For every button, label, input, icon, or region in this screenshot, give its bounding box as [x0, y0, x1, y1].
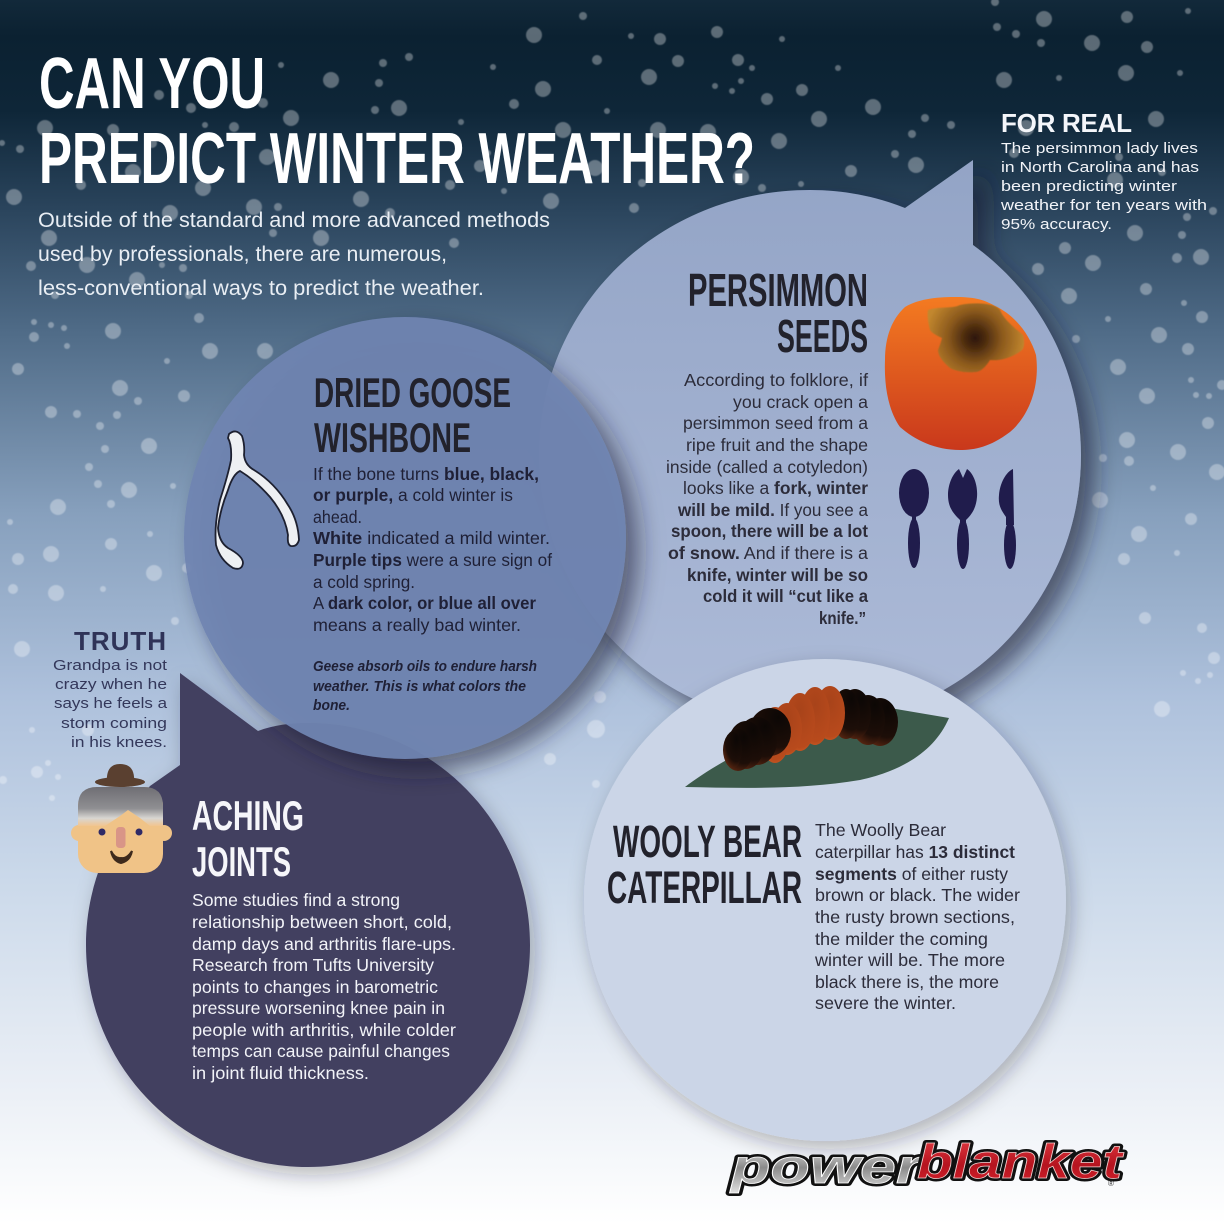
- callout: for real: FOR REAL: [1001, 108, 1132, 138]
- heading: persimmon seeds: [688, 264, 868, 362]
- text: wooly bear body: [814, 820, 1020, 1013]
- text: wishbone body: A dark color, or blue all over: [313, 593, 536, 613]
- logo: powerblanket: power: [728, 1141, 924, 1194]
- heading: aching joints: ACHING: [192, 792, 304, 839]
- text: aching joints body: pressure worsening knee pain in: [192, 998, 445, 1018]
- text: persimmon seeds body: knife, winter will be so: [687, 565, 868, 585]
- text: wishbone body: or purple, a cold winter is: [313, 485, 513, 505]
- callout: for real: [1000, 108, 1207, 233]
- title: CAN YOU: [39, 44, 265, 124]
- text: wishbone note: [313, 658, 537, 714]
- panel: dried goose wishbone circle: [184, 317, 626, 759]
- heading: persimmon seeds: SEEDS: [777, 310, 868, 362]
- heading: aching joints: JOINTS: [192, 838, 291, 885]
- intro text: less-conventional ways to predict the weather.: [38, 277, 484, 300]
- heading: wooly bear caterpillar: [607, 816, 802, 913]
- text: wishbone note: bone.: [313, 697, 350, 714]
- text: wishbone body: White indicated a mild winter.: [313, 528, 550, 548]
- icon: persimmon fruit: [885, 297, 1037, 450]
- intro text: used by professionals, there are numerous,: [38, 243, 447, 266]
- icon: wishbone: [216, 431, 299, 569]
- text: wishbone body: If the bone turns blue, black,: [313, 464, 539, 484]
- text: wishbone body: Purple tips were a sure sign of: [313, 550, 552, 570]
- logo: powerblanket: ®: [1108, 1179, 1114, 1188]
- text: persimmon seeds body: looks like a fork, winter: [683, 478, 868, 498]
- text: wishbone body: a cold spring.: [313, 572, 415, 592]
- text: wishbone body: means a really bad winter.: [313, 615, 521, 635]
- title: PREDICT WINTER WEATHER?: [39, 119, 755, 199]
- callout: for real: 95% accuracy.: [1001, 216, 1112, 233]
- callout: truth: TRUTH: [74, 626, 166, 656]
- snow dots background: [0, 0, 1224, 825]
- text: wooly bear body: brown or black. The wider: [815, 885, 1020, 905]
- text: persimmon seeds body: persimmon seed from a: [683, 413, 868, 433]
- title: [39, 44, 755, 199]
- heading: wooly bear caterpillar: WOOLY BEAR: [613, 816, 802, 867]
- heading: aching joints: [192, 792, 304, 885]
- text: wishbone note: weather. This is what colors the: [313, 678, 526, 695]
- text: persimmon seeds body: of snow. And if there is a: [668, 543, 868, 563]
- logo: powerblanket: [728, 1136, 1124, 1194]
- text: aching joints body: damp days and arthritis flare-ups.: [192, 934, 456, 954]
- text: wishbone note: Geese absorb oils to endure harsh: [313, 658, 537, 675]
- panel: aching joints circle with speech tail: [86, 673, 530, 1167]
- heading: persimmon seeds: PERSIMMON: [688, 264, 868, 316]
- callout: truth: says he feels a: [54, 695, 168, 712]
- text: wooly bear body: severe the winter.: [815, 993, 956, 1013]
- text: aching joints body: people with arthritis, while colder: [192, 1020, 456, 1040]
- text: wooly bear body: winter will be. The more: [814, 950, 1005, 970]
- callout: for real: been predicting winter: [1001, 178, 1177, 195]
- text: persimmon seeds body: knife.”: [819, 608, 866, 628]
- icon: seed knife: [999, 469, 1016, 569]
- icon: seed fork: [948, 469, 977, 569]
- logo: powerblanket: power: [728, 1141, 924, 1194]
- text: persimmon seeds body: ripe fruit and the shape: [686, 435, 868, 455]
- text: persimmon seeds body: inside (called a cotyledon): [666, 457, 868, 477]
- callout: truth: in his knees.: [71, 734, 167, 751]
- text: persimmon seeds body: spoon, there will be a lot: [671, 521, 868, 541]
- text: wooly bear body: the milder the coming: [815, 929, 988, 949]
- text: aching joints body: in joint fluid thickness.: [192, 1063, 369, 1083]
- icon: wooly bear caterpillar on leaf: [685, 686, 949, 788]
- text: wooly bear body: The Woolly Bear: [815, 820, 946, 840]
- panel: persimmon seeds circle with speech tail: [539, 160, 1081, 725]
- callout: for real: weather for ten years with: [1000, 197, 1207, 214]
- text: aching joints body: temps can cause painful changes: [192, 1041, 450, 1061]
- text: aching joints body: [192, 890, 456, 1083]
- text: persimmon seeds body: [666, 370, 868, 628]
- heading: dried goose wishbone: WISHBONE: [314, 414, 471, 461]
- text: wooly bear body: the rusty brown sections,: [815, 907, 1015, 927]
- icon: seed spoon: [899, 469, 929, 568]
- panel: wooly bear circle: [584, 659, 1066, 1141]
- logo: powerblanket: blanket: [917, 1136, 1124, 1189]
- icon: grandpa face: [71, 764, 172, 873]
- text: wooly bear body: segments of either rusty: [815, 864, 1008, 884]
- intro text: Outside of the standard and more advanced methods: [38, 209, 550, 232]
- text: persimmon seeds body: According to folklore, if: [684, 370, 868, 390]
- callout: truth: storm coming: [61, 715, 167, 732]
- callout: truth: [53, 626, 168, 751]
- text: wishbone body: [313, 464, 552, 635]
- logo: powerblanket: blanket: [917, 1136, 1124, 1189]
- callout: for real: in North Carolina and has: [1001, 159, 1199, 176]
- text: wooly bear body: black there is, the more: [815, 972, 999, 992]
- heading: wooly bear caterpillar: CATERPILLAR: [607, 862, 802, 913]
- callout: truth: Grandpa is not: [53, 657, 168, 674]
- text: wooly bear body: caterpillar has 13 distinct: [815, 842, 1015, 862]
- text: persimmon seeds body: will be mild. If you see a: [677, 500, 868, 520]
- text: aching joints body: points to changes in barometric: [192, 977, 438, 997]
- text: persimmon seeds body: you crack open a: [733, 392, 868, 412]
- text: persimmon seeds body: cold it will “cut like a: [703, 586, 868, 606]
- intro text: [38, 209, 550, 300]
- text: aching joints body: relationship between short, cold,: [192, 912, 452, 932]
- text: aching joints body: Research from Tufts University: [192, 955, 434, 975]
- heading: dried goose wishbone: DRIED GOOSE: [314, 369, 511, 416]
- callout: truth: crazy when he: [55, 676, 167, 693]
- text: wishbone body: ahead.: [313, 507, 362, 527]
- callout: for real: The persimmon lady lives: [1001, 140, 1198, 157]
- text: aching joints body: Some studies find a strong: [192, 890, 400, 910]
- heading: dried goose wishbone: [314, 369, 511, 461]
